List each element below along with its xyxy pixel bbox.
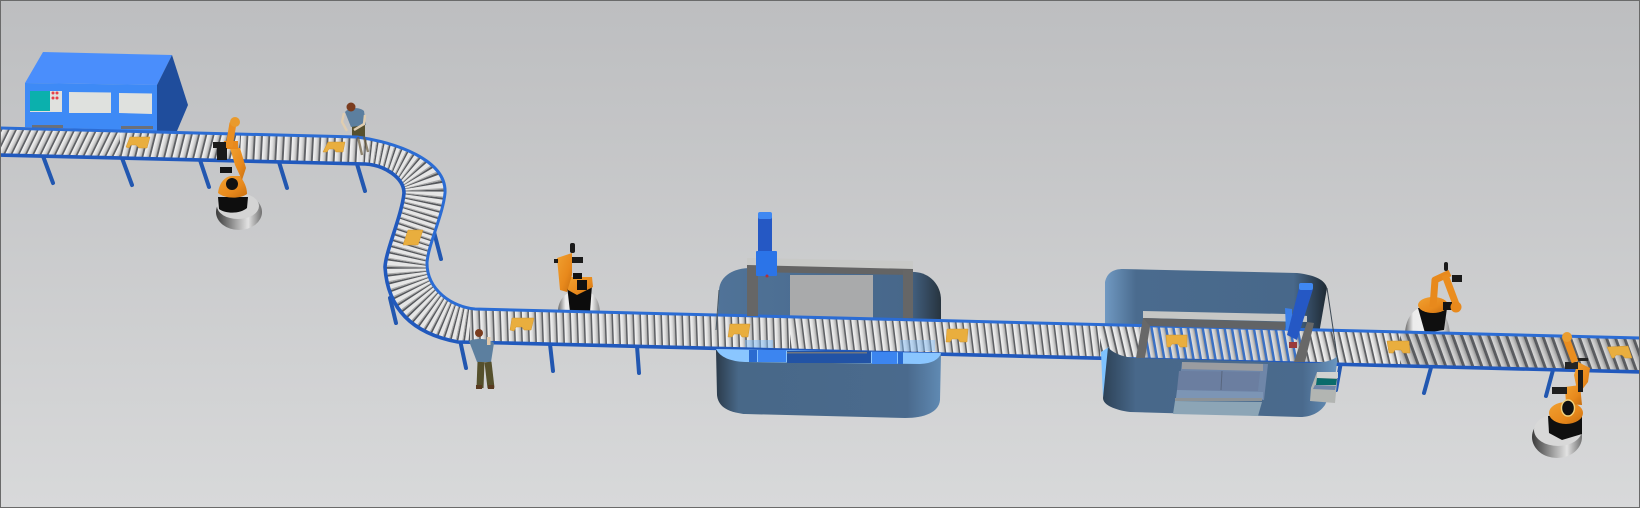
- cable line on second station: [1327, 288, 1338, 362]
- worker behind conveyor: [342, 102, 366, 140]
- second station gantry frame: [1136, 311, 1314, 362]
- back wall of second station: [1105, 269, 1327, 345]
- second station light blue interior: [1101, 347, 1109, 398]
- legs of worker seen through conveyor: [358, 137, 368, 155]
- workpieces on conveyor: [126, 137, 1632, 358]
- machine: blue enclosure: [25, 52, 188, 131]
- first station inner rim: [716, 349, 941, 364]
- second station front wall: [1103, 347, 1338, 417]
- robot 1: [213, 117, 262, 230]
- worker in front of conveyor: [469, 329, 494, 389]
- cable line on first station: [716, 290, 719, 330]
- control box: [1310, 372, 1338, 403]
- robot 2: [554, 243, 600, 314]
- first station front wall: [716, 350, 941, 418]
- roller conveyor: [0, 120, 1640, 380]
- back wall of first station: [716, 268, 941, 352]
- robot 4: [1532, 332, 1590, 458]
- first station gantry frame: [747, 258, 913, 318]
- support legs: [43, 156, 1553, 396]
- robot 3: [1405, 262, 1462, 335]
- second station window: [1173, 362, 1268, 416]
- first station blue gantry tower: [756, 212, 777, 278]
- second station blue gantry tower: [1285, 283, 1313, 348]
- opening in first station back wall: [790, 275, 873, 320]
